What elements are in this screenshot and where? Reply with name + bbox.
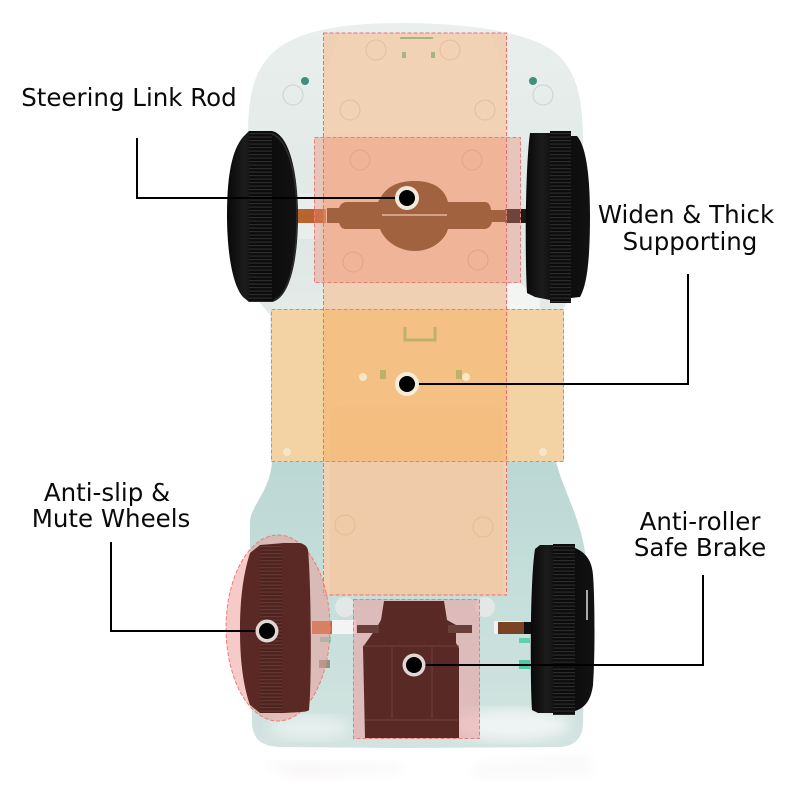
leader: steering link rod bbox=[137, 138, 419, 210]
wheel: front left bbox=[227, 131, 298, 302]
inner seat panel bbox=[330, 405, 503, 595]
leader: anti-slip wheels bbox=[111, 542, 278, 642]
wheel: rear right bbox=[531, 544, 594, 715]
band underlay bbox=[271, 309, 564, 462]
wheel: front right bbox=[526, 131, 590, 303]
highlight: central vertical strip bbox=[324, 33, 506, 595]
axle: front bbox=[296, 193, 530, 239]
car body bbox=[248, 23, 586, 748]
white patches near rear bumper bbox=[450, 709, 570, 741]
label: anti-slip and mute wheels bbox=[32, 478, 190, 533]
green marks bbox=[400, 37, 433, 39]
label: anti-roller safe brake bbox=[634, 507, 766, 562]
wheel: rear left (highlighted) bbox=[226, 535, 330, 721]
axle: rear bbox=[312, 597, 534, 669]
highlight: central strip outline bbox=[324, 33, 506, 595]
label: widen and thick supporting bbox=[598, 200, 775, 256]
underside bright floor bbox=[323, 33, 507, 595]
brake unit bbox=[357, 601, 472, 738]
highlight: widen supporting band bbox=[272, 310, 564, 462]
label: widen and thick supporting: Widen & Thick bbox=[598, 200, 775, 229]
label: anti-roller safe brake: Safe Brake bbox=[634, 533, 766, 562]
leader: safe brake bbox=[402, 575, 703, 676]
floor shadow bbox=[262, 755, 590, 778]
label: anti-slip and mute wheels: Mute Wheels bbox=[32, 504, 190, 533]
leader: widen and thick supporting bbox=[395, 274, 688, 396]
label: steering link rod: Steering Link Rod bbox=[21, 83, 237, 112]
band details bbox=[283, 327, 547, 456]
label: widen and thick supporting: Supporting bbox=[623, 227, 757, 256]
highlight: steering box bbox=[314, 138, 520, 282]
label: anti-roller safe brake: Anti-roller bbox=[640, 507, 761, 536]
screw holes bbox=[301, 77, 309, 85]
label: anti-slip and mute wheels: Anti-slip & bbox=[44, 478, 170, 507]
steering link rod bbox=[327, 181, 505, 251]
highlight: safe brake box bbox=[354, 600, 480, 738]
